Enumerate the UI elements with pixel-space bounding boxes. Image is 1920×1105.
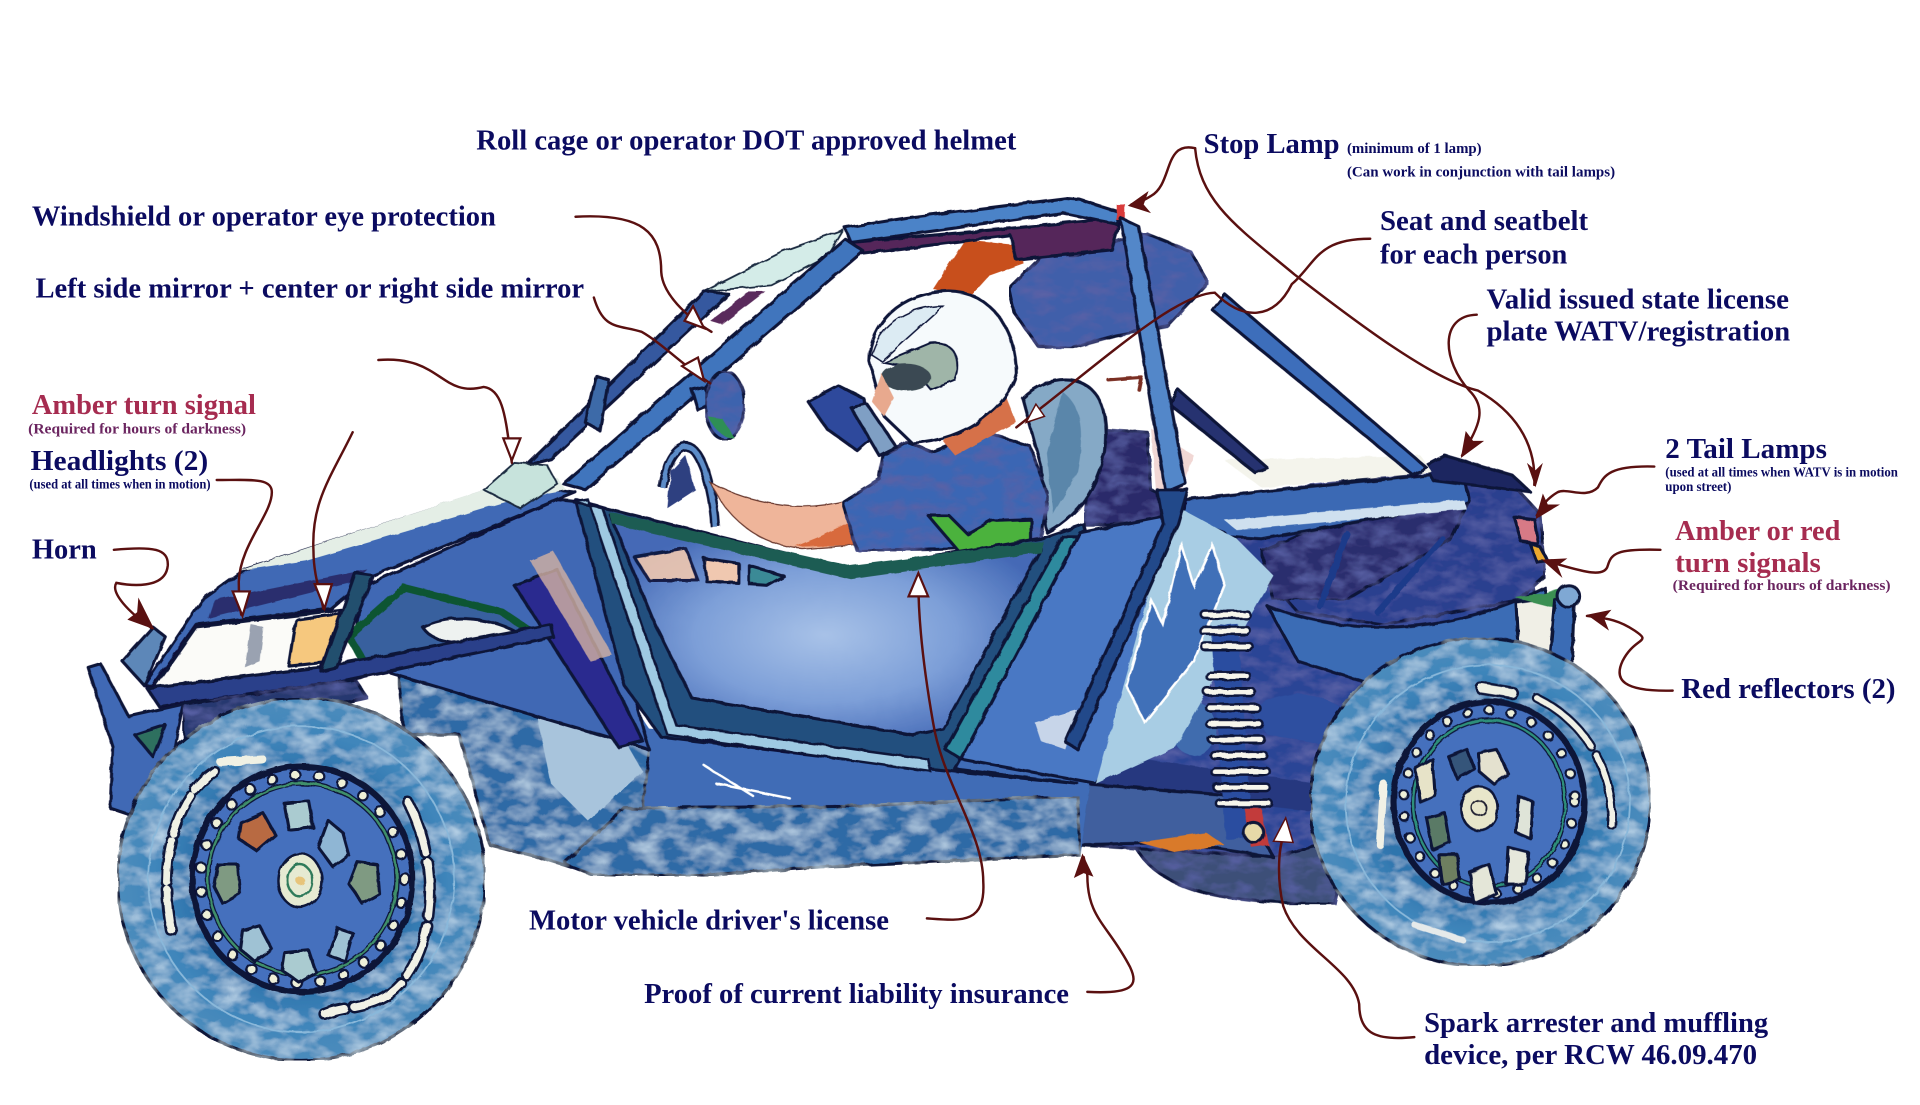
- white helmet: [869, 291, 1016, 443]
- label: stop lamp: [1204, 129, 1615, 180]
- label: driver's license: Motor vehicle driver's license: [529, 905, 889, 936]
- rear door panel with graphics: [945, 490, 1273, 784]
- rear chassis and suspension background: [1071, 539, 1545, 857]
- lower frame bar: [147, 573, 553, 707]
- rear bumper posts: [1515, 585, 1580, 667]
- label: liability insurance: Proof of current liability insurance: [644, 979, 1069, 1010]
- leader: horn: [114, 548, 168, 629]
- label: horn: Horn: [32, 534, 97, 565]
- leader: mirrors: [594, 298, 710, 383]
- driver jacket: [842, 432, 1048, 551]
- gloved hands: [808, 386, 896, 456]
- label: mirrors: Left side mirror + center or right side mirror: [36, 274, 584, 305]
- lower sill: [563, 765, 1080, 876]
- label: tail lamps: 2 Tail Lamps: [1665, 434, 1827, 465]
- headrests: [1009, 233, 1209, 348]
- driver seat: [1022, 379, 1106, 533]
- leader: stop lamp to roof: [1128, 147, 1195, 213]
- front fender and inner wheel well: [398, 643, 649, 872]
- label: amber turn signal: Amber turn signal: [32, 390, 256, 421]
- rear inner tire and exhaust underside: [1133, 842, 1347, 904]
- leader: license plate: [1449, 315, 1484, 458]
- rear tire and rim: [1310, 638, 1651, 966]
- label: tail lamps: [1665, 434, 1898, 494]
- front body side panel: [349, 500, 649, 749]
- tail lamps and amber rear signal: [1513, 517, 1548, 562]
- label: red reflectors: Red reflectors (2): [1681, 674, 1896, 705]
- windshield top glass: [704, 230, 842, 291]
- nose and hood: [144, 463, 576, 686]
- leader: spark arrester: [1273, 818, 1414, 1038]
- label: amber or red turn signals: [1673, 516, 1891, 594]
- label: spark arrester: Spark arrester and muffling: [1424, 1008, 1768, 1039]
- roll cage A-pillars and rear pillar: [527, 218, 1185, 492]
- leader: headlights: [217, 480, 272, 616]
- leader: driver's license: [909, 573, 983, 920]
- orange passenger arm: [933, 240, 1024, 300]
- label: amber turn signal: [28, 390, 256, 437]
- leader: tail lamps: [1536, 466, 1654, 519]
- label: seat and seatbelt: [1380, 206, 1589, 270]
- body backing behind door and sill: [588, 637, 1090, 876]
- rear rim: [1393, 702, 1584, 904]
- label: amber or red turn signals: Amber or red: [1675, 516, 1841, 547]
- rear body deck and side panel: [1182, 456, 1545, 624]
- front tire and rim: [118, 698, 485, 1060]
- label: tail lamps: upon street): [1665, 479, 1731, 494]
- door frame: [573, 500, 1087, 784]
- label: headlights: [29, 446, 211, 492]
- illustration: off-road vehicle with driver: [88, 198, 1651, 1060]
- leader: amber turn signal: [313, 432, 353, 609]
- label: headlights: (used at all times when in motion): [29, 477, 211, 492]
- label: spark arrester: device, per RCW 46.09.470: [1424, 1040, 1757, 1071]
- leader: rear signals: [1542, 550, 1660, 578]
- roof panel and cage top: [845, 198, 1125, 260]
- leader: seat and seatbelt: [1016, 239, 1370, 427]
- label: roll cage or helmet: Roll cage or operator DOT approved helmet: [476, 125, 1017, 156]
- driver leg: [710, 482, 857, 549]
- label: spark arrester: [1424, 1008, 1768, 1071]
- leader: stop lamp to rear: [1195, 148, 1543, 487]
- label: tail lamps: (used at all times when WATV is in motion: [1665, 464, 1898, 479]
- front bumper: [88, 627, 367, 814]
- roll cage rear tubes: [1169, 294, 1427, 475]
- label: license plate: plate WATV/registration: [1487, 316, 1791, 347]
- mirror: [585, 371, 744, 440]
- rear seat bay: [1084, 377, 1194, 527]
- label: license plate: [1487, 285, 1791, 347]
- label: stop lamp: (minimum of 1 lamp): [1347, 141, 1482, 157]
- label: amber or red turn signals: turn signals: [1675, 548, 1821, 579]
- label: seat and seatbelt: Seat and seatbelt: [1380, 206, 1589, 237]
- driver: [710, 291, 1106, 558]
- label: stop lamp: Stop Lamp: [1204, 129, 1340, 160]
- front rim: [192, 767, 413, 992]
- leader: red reflectors: [1587, 610, 1673, 691]
- suspension coil: [1204, 615, 1269, 847]
- label: amber or red turn signals: (Required for hours of darkness): [1673, 578, 1891, 594]
- steering wheel: [662, 447, 715, 527]
- leader: windshield: [576, 216, 711, 332]
- label: windshield: Windshield or operator eye protection: [32, 201, 496, 232]
- neck: [943, 392, 1016, 456]
- label: license plate: Valid issued state license: [1487, 285, 1789, 316]
- green harness: [928, 516, 1031, 558]
- label: stop lamp: (Can work in conjunction with tail lamps): [1347, 164, 1615, 180]
- leader: roll cage: [378, 360, 520, 463]
- leader: liability insurance: [1074, 853, 1133, 992]
- label: seat and seatbelt: for each person: [1380, 239, 1568, 270]
- headlight and amber signal: [153, 610, 340, 688]
- label: headlights: Headlights (2): [31, 446, 208, 477]
- label: amber turn signal: (Required for hours of darkness): [28, 421, 246, 437]
